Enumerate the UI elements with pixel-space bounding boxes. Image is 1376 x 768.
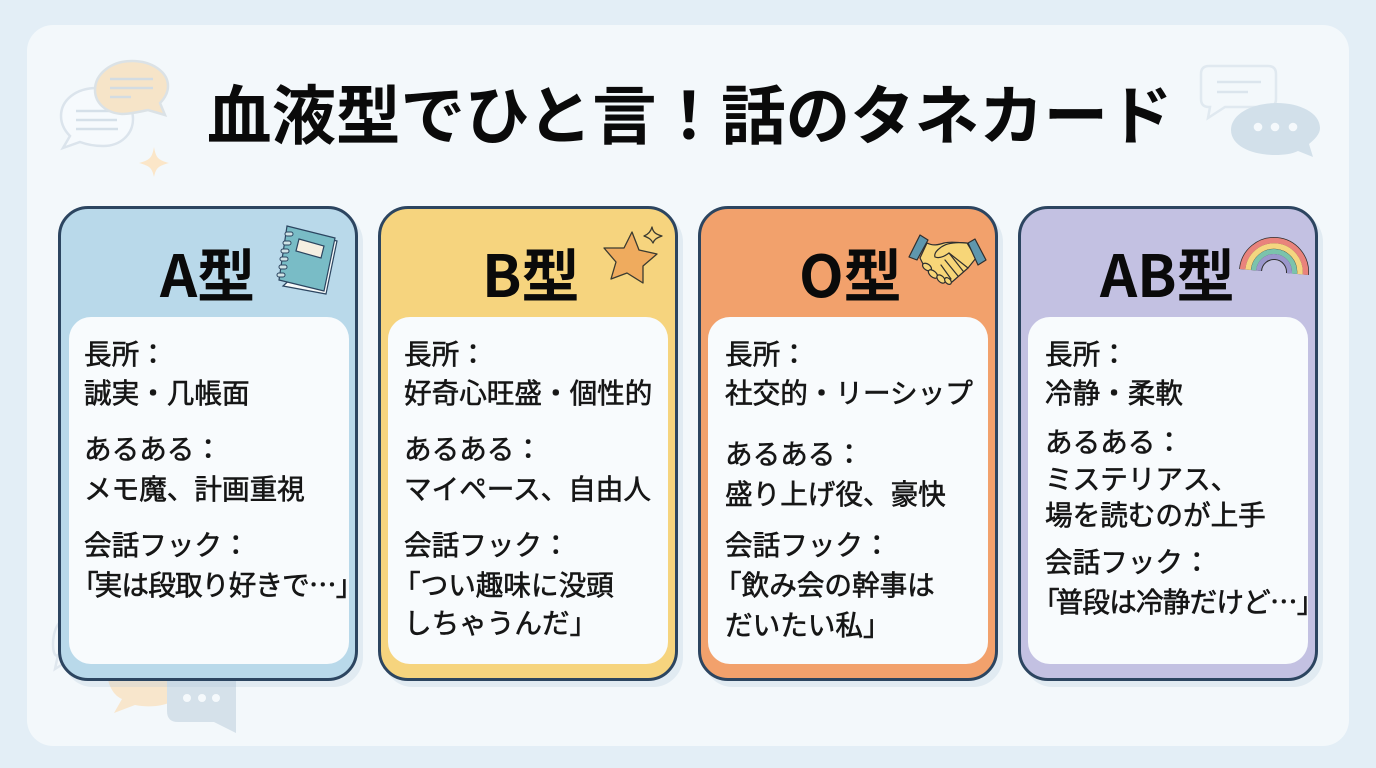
text: O型 会話フック value line 2: だいたい私」	[725, 603, 891, 643]
icon: speech bubbles bottom left	[52, 622, 236, 733]
text: A型 長所: 長所：	[84, 332, 167, 372]
text: B型 会話フック value: 「つい趣味に没頭	[393, 563, 614, 603]
icon: rainbow	[1239, 237, 1309, 275]
text: B型 あるある value: マイペース、自由人	[404, 467, 651, 507]
heading: AB型: AB型	[1100, 230, 1235, 314]
panel: B型 text	[388, 317, 668, 664]
heading: B型: B型	[482, 230, 580, 314]
panel: O型 card	[698, 206, 1003, 687]
text: AB型 長所 value: 冷静・柔軟	[1045, 371, 1183, 411]
panel: A型 card	[58, 206, 363, 687]
text: B型 会話フック: 会話フック：	[404, 523, 570, 563]
card body AB	[1018, 206, 1318, 681]
text: A型 会話フック value: 「実は段取り好きで…」	[71, 563, 363, 603]
text: B型 長所: 長所：	[404, 332, 487, 372]
icon: notebook	[276, 225, 338, 295]
text: O型 会話フック: 会話フック：	[725, 523, 891, 563]
text: AB型 会話フック value: 「普段は冷静だけど…」	[1032, 580, 1324, 620]
panel: AB型 text	[1028, 317, 1308, 664]
text: O型 あるある value: 盛り上げ役、豪快	[725, 472, 946, 512]
text: O型 会話フック value: 「飲み会の幹事は	[714, 563, 935, 603]
text: AB型 あるある value line 2: 場を読むのが上手	[1045, 493, 1266, 533]
text: O型 長所: 長所：	[725, 332, 808, 372]
panel: A型 text	[69, 317, 349, 664]
icon: speech bubbles top left	[60, 60, 170, 176]
heading: O型: O型	[799, 230, 902, 314]
panel: B型 card	[378, 206, 683, 687]
text: A型 あるある: あるある：	[84, 427, 222, 467]
text: B型 長所 value: 好奇心旺盛・個性的	[404, 371, 652, 411]
card body A	[58, 206, 358, 681]
icon: speech bubbles top right	[1200, 64, 1320, 157]
panel: O型 text	[708, 317, 988, 664]
text: B型 あるある: あるある：	[404, 427, 542, 467]
card body B	[378, 206, 678, 681]
icon: star	[603, 226, 663, 284]
icon: handshake	[908, 234, 987, 285]
heading: A型: A型	[160, 230, 255, 314]
text: A型 会話フック: 会話フック：	[84, 523, 250, 563]
text: O型 長所 value: 社交的・リーシップ	[725, 371, 973, 411]
title: 血液型でひと言！話のタネカード	[207, 64, 1173, 158]
card body O	[698, 206, 998, 681]
text: AB型 会話フック: 会話フック：	[1045, 540, 1211, 580]
text: AB型 あるある value: ミステリアス、	[1045, 457, 1238, 497]
text: B型 会話フック value line 2: しちゃうんだ」	[404, 601, 597, 641]
text: AB型 長所: 長所：	[1045, 332, 1128, 372]
text: A型 長所 value: 誠実・几帳面	[84, 371, 250, 411]
text: O型 あるある: あるある：	[725, 432, 863, 472]
text: AB型 あるある: あるある：	[1045, 420, 1183, 460]
text: A型 あるある value: メモ魔、計画重視	[84, 467, 305, 507]
